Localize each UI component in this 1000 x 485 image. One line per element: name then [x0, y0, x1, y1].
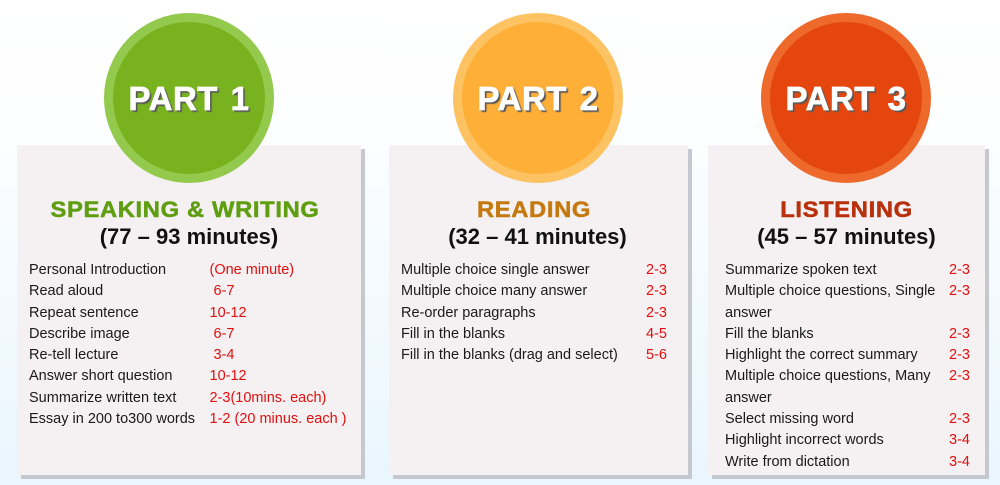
list: part 3 tasks: Multiple choice questions, Many [725, 368, 931, 384]
list: part 1 tasks: Summarize written text [29, 390, 176, 406]
icon: part 3 circle [761, 13, 931, 183]
list: part 3 tasks: Write from dictation [725, 454, 850, 470]
list: part 3 counts: 2-3 [949, 283, 970, 299]
panel: part 1 card [17, 145, 361, 475]
list: part 2 tasks: Re-order paragraphs [401, 305, 536, 321]
list: part 3 counts: 3-4 [949, 432, 970, 448]
list: part 1 tasks: Personal Introduction [29, 262, 166, 278]
list: part 2 tasks: Fill in the blanks [401, 326, 505, 342]
icon: part 1 circle [104, 13, 274, 183]
list: part 1 counts: 6-7 [214, 326, 234, 342]
list: part 3 tasks: Multiple choice questions, Single [725, 283, 935, 299]
list: part 2 tasks: Fill in the blanks (drag and select) [401, 347, 618, 363]
list: part 2 tasks: Multiple choice single answer [401, 262, 590, 278]
list: part 1 tasks [29, 262, 195, 427]
list: part 3 tasks: answer [725, 305, 772, 321]
list: part 3 counts: 3-4 [949, 454, 970, 470]
list: part 2 tasks: Multiple choice many answer [401, 283, 587, 299]
text: part 1 duration: (77 – 93 minutes) [100, 224, 278, 249]
list: part 2 counts: 2-3 [646, 262, 667, 278]
list: part 1 counts: 10-12 [210, 368, 247, 384]
list: part 3 counts: 2-3 [949, 326, 970, 342]
list: part 3 tasks: Highlight incorrect words [725, 432, 884, 448]
heading: listening: LISTENING [780, 197, 913, 222]
list: part 3 counts: 2-3 [949, 347, 970, 363]
list: part 1 counts: 10-12 [210, 305, 247, 321]
list: part 3 tasks: answer [725, 390, 772, 406]
list: part 1 counts: 2-3(10mins. each) [210, 390, 326, 406]
list: part 2 tasks [401, 262, 618, 363]
list: part 2 counts: 2-3 [646, 305, 667, 321]
list: part 2 counts: 4-5 [646, 326, 667, 342]
list: part 3 counts: 2-3 [949, 411, 970, 427]
list: part 1 tasks: Re-tell lecture [29, 347, 118, 363]
list: part 1 counts [210, 262, 347, 427]
panel: part 2 card [389, 145, 688, 475]
list: part 3 counts: 2-3 [949, 368, 970, 384]
list: part 1 counts: 6-7 [214, 283, 234, 299]
list: part 1 counts: (One minute) [210, 262, 294, 278]
text: part 3 duration: (45 – 57 minutes) [757, 224, 936, 249]
list: part 3 tasks [725, 262, 935, 470]
list: part 3 tasks: Summarize spoken text [725, 262, 877, 278]
heading: reading: READING [477, 197, 591, 222]
list: part 3 tasks: Highlight the correct summary [725, 347, 918, 363]
list: part 3 tasks: Select missing word [725, 411, 854, 427]
panel: part 3 card [708, 145, 985, 475]
heading: speaking and writing: SPEAKING & WRITING [50, 197, 320, 222]
list: part 1 tasks: Essay in 200 to300 words [29, 411, 195, 427]
text: part 2 duration: (32 – 41 minutes) [448, 224, 627, 249]
list: part 2 counts [646, 262, 667, 363]
list: part 1 tasks: Answer short question [29, 368, 172, 384]
heading: part 2: PART 2 [478, 80, 598, 117]
list: part 3 counts [949, 262, 970, 470]
heading: part 1: PART 1 [129, 80, 249, 117]
list: part 1 counts: 1-2 (20 minus. each ) [210, 411, 347, 427]
list: part 1 tasks: Read aloud [29, 283, 103, 299]
list: part 3 tasks: Fill the blanks [725, 326, 814, 342]
list: part 1 counts: 3-4 [214, 347, 234, 363]
list: part 1 tasks: Describe image [29, 326, 130, 342]
heading: part 3: PART 3 [786, 80, 906, 117]
list: part 2 counts: 5-6 [646, 347, 667, 363]
list: part 2 counts: 2-3 [646, 283, 667, 299]
list: part 1 tasks: Repeat sentence [29, 305, 139, 321]
list: part 3 counts: 2-3 [949, 262, 970, 278]
icon: part 2 circle [453, 13, 623, 183]
